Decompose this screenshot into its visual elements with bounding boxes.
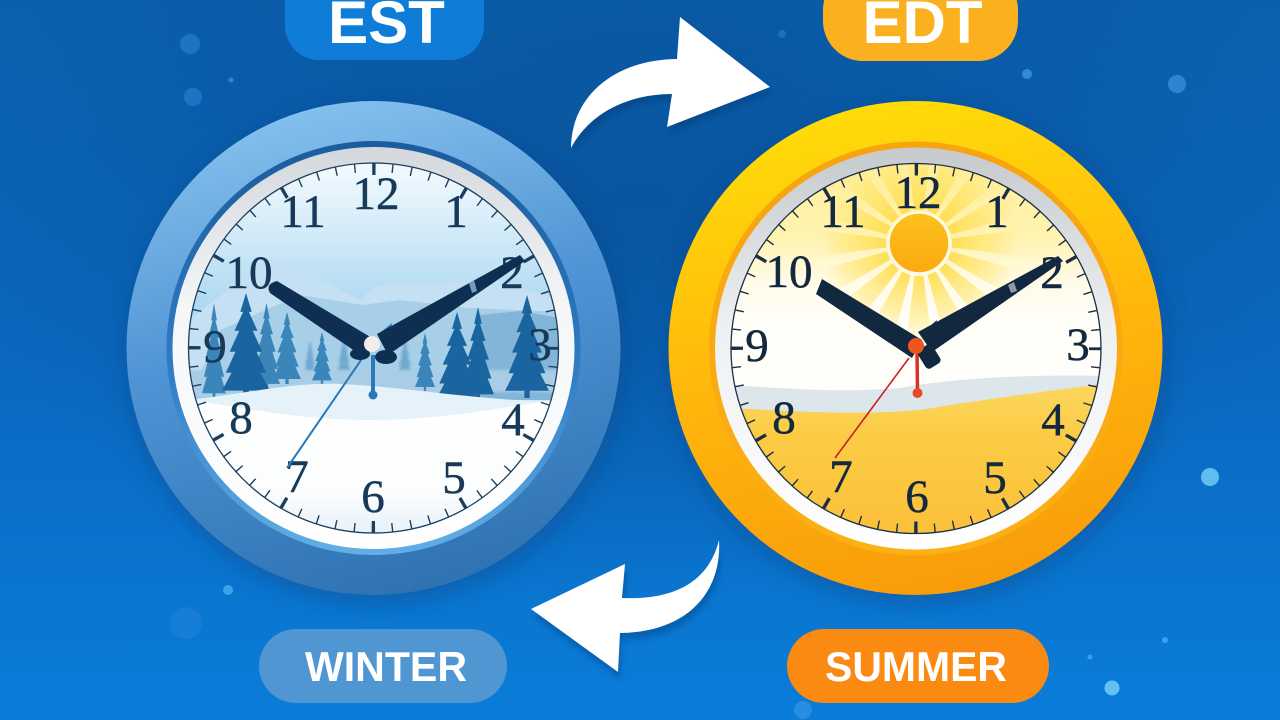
winter clock numerals: 9 — [203, 321, 227, 373]
winter clock — [126, 101, 626, 604]
winter landscape dial — [188, 163, 560, 535]
summer clock hands — [816, 256, 1063, 458]
winter clock rim — [172, 147, 574, 549]
label pill: EDT — [823, 0, 1018, 61]
summer clock numerals: 2 — [1040, 247, 1064, 299]
label pill: WINTER — [259, 629, 507, 703]
label pill: WINTER: WINTER — [305, 643, 467, 690]
sun — [824, 164, 1014, 340]
summer clock numerals: 11 — [820, 186, 866, 238]
summer clock — [668, 101, 1168, 604]
summer clock bezel — [709, 142, 1123, 556]
arrow: EDT to EST — [531, 540, 721, 679]
summer clock numerals: 4 — [1041, 394, 1065, 446]
winter clock numerals: 3 — [528, 319, 552, 371]
arrow: EST to EDT — [571, 17, 773, 154]
winter clock numerals: 11 — [280, 186, 326, 238]
summer clock numerals: 7 — [829, 451, 853, 503]
winter clock numerals: 4 — [501, 394, 525, 446]
winter clock numerals: 7 — [285, 451, 309, 503]
winter clock numerals: 10 — [226, 247, 272, 299]
winter clock numerals: 8 — [229, 392, 253, 444]
summer clock numerals: 8 — [772, 392, 796, 444]
summer clock outer ring — [668, 101, 1162, 595]
summer clock numerals: 3 — [1066, 319, 1090, 371]
summer clock numerals — [745, 167, 1090, 523]
winter clock hands — [269, 255, 525, 468]
summer clock numerals: 10 — [766, 246, 812, 298]
summer clock numerals: 6 — [905, 471, 929, 523]
winter clock numerals — [203, 168, 552, 523]
winter clock numerals: 5 — [442, 452, 466, 504]
summer dial ticks — [731, 164, 1101, 534]
winter clock numerals: 2 — [500, 247, 524, 299]
summer landscape dial — [730, 143, 1102, 535]
winter clock numerals: 12 — [352, 168, 400, 220]
summer clock numerals: 9 — [745, 320, 769, 372]
winter clock outer ring — [126, 101, 620, 595]
summer clock numerals: 1 — [985, 186, 1009, 238]
label pill: SUMMER: SUMMER — [825, 643, 1007, 690]
winter dial ticks — [188, 163, 558, 533]
label pill: SUMMER — [787, 629, 1049, 703]
summer clock numerals: 12 — [894, 167, 942, 219]
summer clock numerals: 5 — [983, 452, 1007, 504]
winter clock bezel — [166, 141, 580, 555]
winter clock numerals: 1 — [444, 186, 468, 238]
label pill: EST — [285, 0, 484, 60]
winter clock numerals: 6 — [361, 471, 385, 523]
floating background dots — [170, 30, 1219, 719]
summer clock rim — [715, 148, 1117, 550]
